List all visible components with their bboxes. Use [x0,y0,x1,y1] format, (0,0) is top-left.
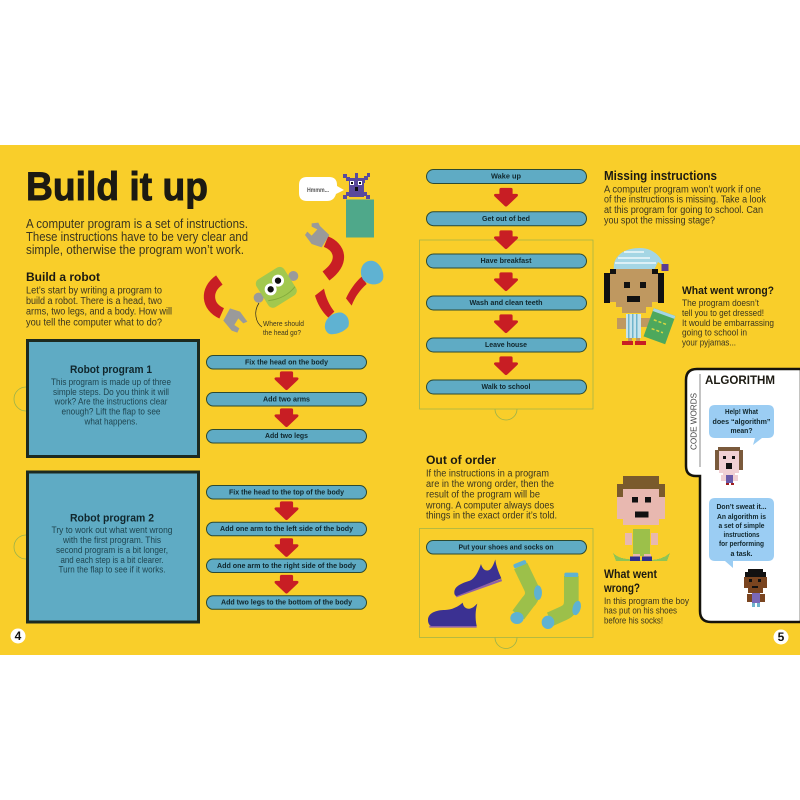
speech bubble: answer: a task. [730,551,753,558]
green book [644,308,675,344]
build a robot text: Let’s start by writing a program to [26,286,163,296]
flowchart: going to school: Walk to school [482,382,530,391]
out of order text: are in the wrong order, then the [426,479,555,490]
what went wrong text (pyjamas): going to school in [682,328,747,338]
robot head [254,265,299,310]
robot body [346,200,374,238]
flowchart: going to school [426,170,586,394]
what went wrong text (shoes) [604,596,689,625]
callout: where should the head go [256,303,304,337]
panel: robot program 2: Turn the flap to see if it works. [58,565,166,575]
panel: robot program 1: work? Are the instructions clear [54,397,167,407]
robot arm: left [209,280,247,333]
heading: what went wrong (pyjamas): What went wrong? [682,285,774,297]
intro text [26,216,248,257]
panel: robot program 1: enough? Lift the flap to see [62,407,160,417]
missing instructions text: at this program for going to school. Can [604,205,763,216]
title: Build it up [26,165,208,209]
heading: what went wrong (shoes) [603,567,657,595]
heading: algorithm: ALGORITHM [705,373,775,387]
callout: where should the head go: the head go? [263,328,301,337]
robot arm: upper right [305,223,338,276]
speech bubble: answer: Don’t sweat it... [716,504,767,511]
missing instructions text [604,184,766,227]
intro text: A computer program is a set of instructions. [26,216,248,231]
flowchart: robot program 1: Add two legs [265,431,308,440]
speech bubble: answer: instructions [724,532,760,539]
flowchart: robot program 1: Add two arms [263,394,310,403]
panel: robot program 1 [28,340,198,456]
out of order text [425,469,557,522]
robot leg: right [346,261,383,306]
panel: robot program 2: second program is a bit longer, [56,545,168,555]
panel: code words [686,369,800,622]
missing instructions text: you spot the missing stage? [604,216,715,227]
what went wrong text (pyjamas): your pyjamas... [682,338,736,348]
heading: out of order: Out of order [426,453,496,467]
instruction pill: shoes and socks: Put your shoes and socks on [458,542,554,551]
icon: pixel boy [613,476,670,561]
flowchart: robot program 2: Add one arm to the right side of the body [217,561,356,570]
flowchart: robot program 2 [206,486,366,609]
build a robot text: you tell the computer what to do? [26,317,163,328]
what went wrong text (pyjamas): It would be embarrassing [682,318,774,328]
missing instructions text: A computer program won’t work if one [604,184,762,195]
callout: where should the head go: Where should [263,319,304,328]
flowchart: robot program 1 [206,356,366,443]
speech bubble: answer [709,498,774,568]
flap outline: out of order [420,528,593,648]
build a robot text [26,286,172,328]
out of order text: If the instructions in a program [426,469,549,480]
speech bubble: answer: for performing [719,541,764,548]
what went wrong text (shoes): has put on his shoes [604,606,677,616]
flowchart: going to school: Leave house [485,340,527,349]
speech bubble: question [709,405,774,445]
icon: socks [510,560,582,629]
speech bubble: answer: An algorithm is [717,514,766,521]
yellow spread background [0,145,800,655]
what went wrong text (shoes): before his socks! [604,615,663,625]
flowchart: going to school: Have breakfast [480,256,532,265]
what went wrong text (pyjamas) [682,298,774,348]
page number 4 [10,628,26,644]
speech bubble: question: Help! What [725,409,759,416]
panel: robot program 2: Robot program 2 [70,513,154,525]
flowchart: robot program 2: Add two legs to the bottom of the body [221,598,352,607]
what went wrong text (pyjamas): The program doesn’t [682,298,759,308]
flap tab: program 2 [14,535,26,559]
speech bubble: Hmmm: Hmmm... [307,187,329,194]
out of order text: wrong. A computer always does [425,500,554,511]
flowchart: robot program 2: Fix the head to the top of the body [229,488,344,496]
pyjama body [617,314,650,345]
heading: missing instructions: Missing instructions [604,169,717,183]
page number 5 [774,630,788,644]
heading: what went wrong (shoes): What went [604,567,657,581]
heading: what went wrong (shoes): wrong? [603,581,640,595]
icon: pixel child in pyjamas [604,248,675,345]
panel: robot program 2: and each step is a bit clearer. [60,555,164,565]
speech bubble: question: mean? [730,428,752,435]
speech bubble: answer: a set of simple [718,523,765,530]
instruction pill: shoes and socks [426,540,586,554]
flap outline: missing instructions [420,240,593,420]
build a robot text: build a robot. There is a head, two [26,296,163,307]
out of order text: things in the exact order it’s told. [426,511,557,522]
panel: robot program 2: Try to work out what went wrong [52,525,172,535]
panel: robot program 1: simple steps. Do you think it will [53,387,169,397]
flowchart: robot program 1: Fix the head on the body [245,358,328,366]
build a robot text: arms, two legs, and a body. How will [26,306,172,318]
icon: shoes [428,559,502,627]
intro text: simple, otherwise the program won’t work. [26,242,244,257]
what went wrong text (shoes): In this program the boy [604,596,689,606]
panel: robot program 2: with the first program. This [62,535,161,545]
panel: robot program 1: This program is made up of three [51,377,171,387]
intro text: These instructions have to be very clear and [26,229,248,244]
page number 4: 4 [15,629,22,643]
missing instructions text: of the instructions is missing. Take a look [604,195,766,206]
speech bubble: question: does “algorithm” [712,419,770,426]
flap tab: program 1 [14,387,26,411]
what went wrong text (pyjamas): tell you to get dressed! [682,308,764,318]
page number 5: 5 [778,630,785,644]
heading: build a robot: Build a robot [26,270,100,284]
icon: pixel girl [715,447,743,485]
flowchart: going to school: Wake up [491,171,522,180]
icon: pixel boy with dark skin [744,569,767,607]
flowchart: robot program 2: Add one arm to the left side of the body [220,524,353,533]
panel: robot program 1: what happens. [84,416,138,426]
nightcap [614,248,668,271]
speech bubble: Hmmm [299,177,344,201]
panel: robot program 2 [28,472,198,622]
head and hair [604,269,664,313]
flowchart: going to school: Wash and clean teeth [470,298,542,307]
panel: robot program 1: Robot program 1 [70,364,152,376]
flowchart: going to school: Get out of bed [482,214,530,223]
out of order text: result of the program will be [426,490,541,501]
label: code words: CODE WORDS [688,393,698,450]
robot leg: left [315,289,349,334]
icon: purple pixel monster [343,173,370,199]
